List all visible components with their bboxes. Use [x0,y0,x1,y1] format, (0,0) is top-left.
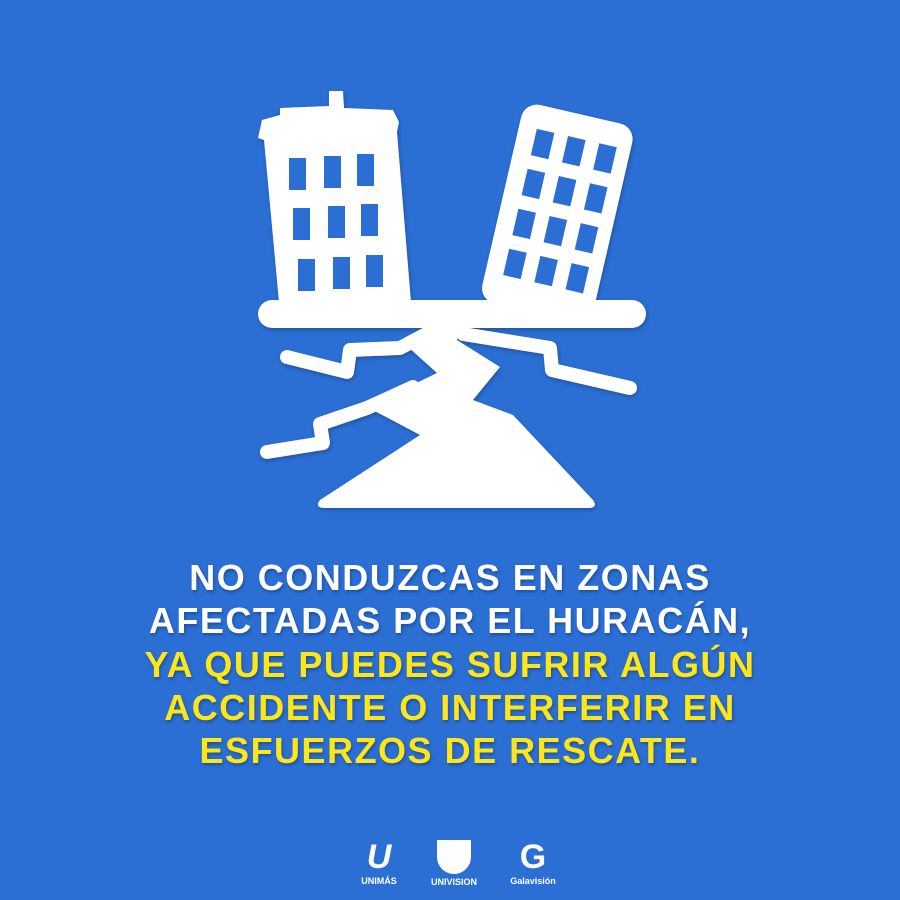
logo: galavision [510,838,556,886]
icon: earthquake buildings [257,91,649,512]
text: white lines: AFECTADAS POR EL HURACÁN, [149,600,751,641]
ground platform [258,300,646,328]
logos [361,838,556,887]
left building [258,91,411,302]
logo: galavision: Galavisión [510,876,556,886]
text: white lines: NO CONDUZCAS EN ZONAS [189,557,711,598]
logo: univision: UNIVISION [431,877,477,887]
text: white lines [149,557,751,642]
logo: unimas: UNIMÁS [361,876,397,886]
text: yellow lines: ACCIDENTE O INTERFERIR EN [164,687,736,728]
logo: galavision: G [520,838,546,876]
text: yellow lines [144,644,756,771]
logo: unimas [361,838,397,886]
logo: unimas: U [367,838,391,876]
text: yellow lines: YA QUE PUEDES SUFRIR ALGÚN [144,644,756,685]
right building [479,101,636,326]
text: yellow lines: ESFUERZOS DE RESCATE. [200,730,700,771]
logo: univision [431,840,477,887]
cracks [267,332,630,452]
